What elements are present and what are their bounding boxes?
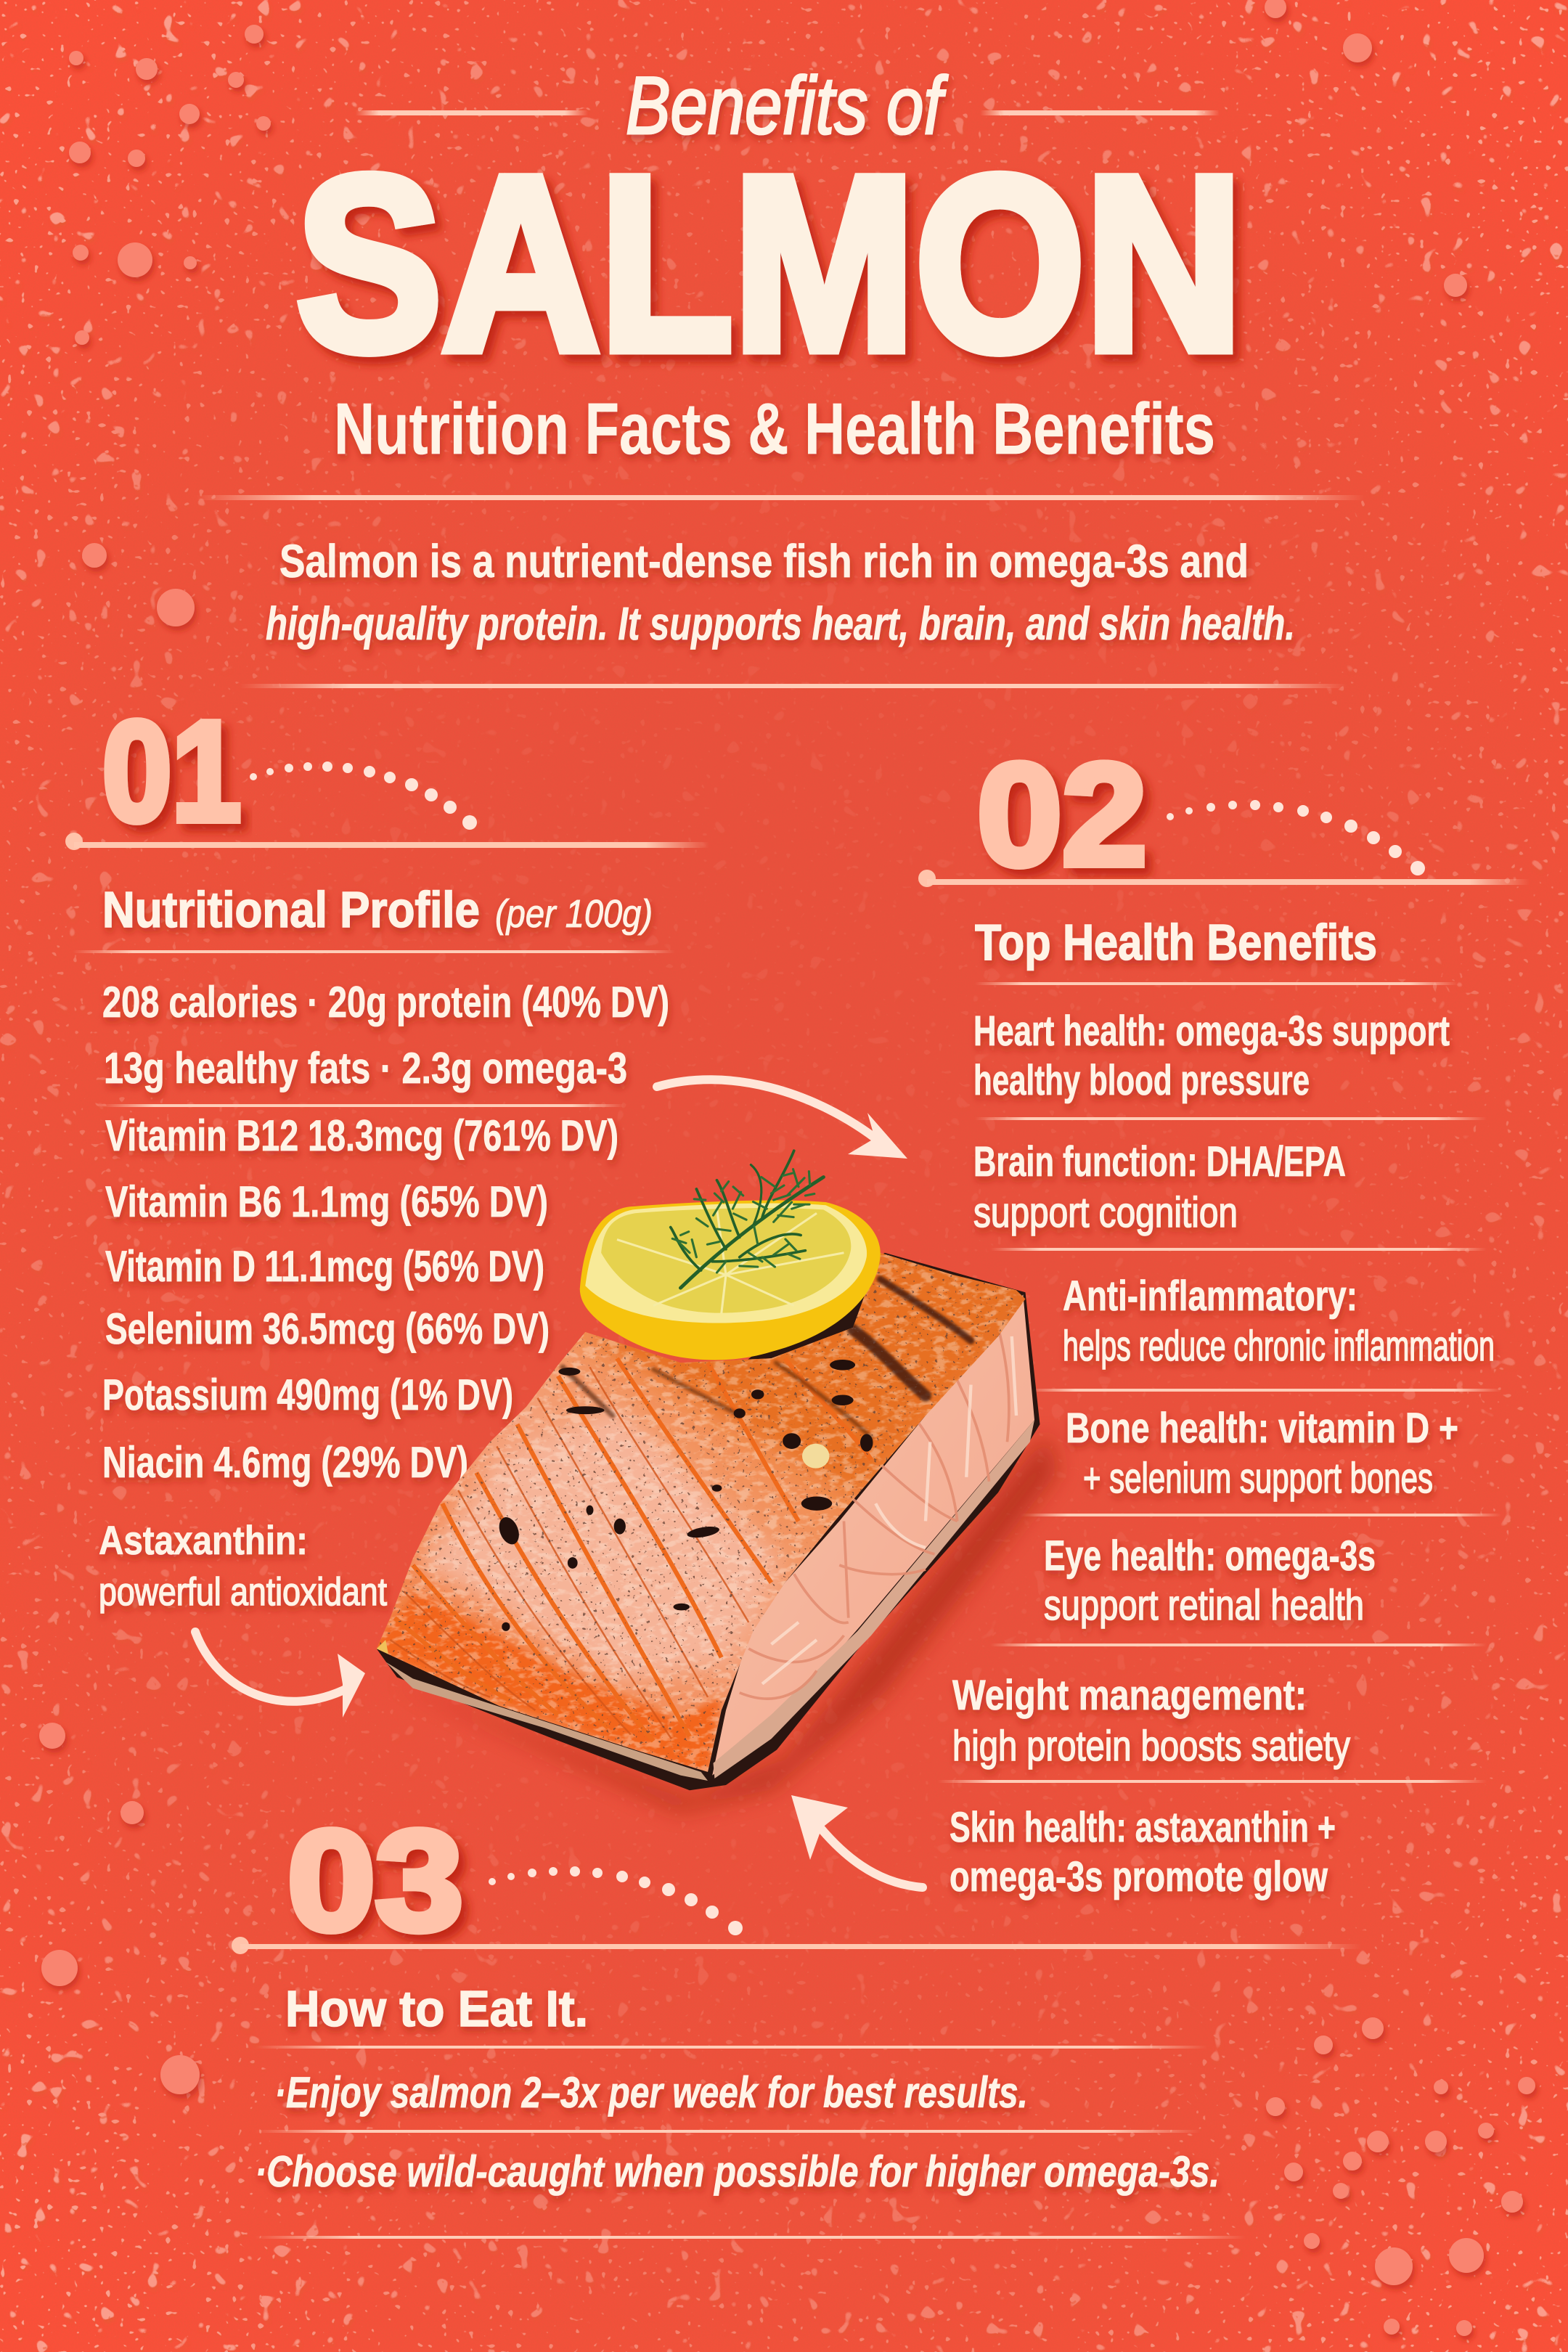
- salmon fillet illustration: [363, 1151, 1057, 1811]
- fillet top face: [377, 1253, 1025, 1772]
- header rule left: [356, 110, 588, 115]
- benefit: heart: healthy blood pressure: [973, 1057, 1310, 1104]
- arrow: antioxidant to salmon: [195, 1632, 365, 1718]
- dill sprig: [671, 1151, 823, 1288]
- benefit: bone: Bone health: vitamin D +: [1066, 1405, 1458, 1452]
- benefit: skin: omega-3s promote glow: [950, 1853, 1328, 1900]
- benefit: heart: [973, 1008, 1450, 1104]
- heading: nutritional profile: Nutritional Profile: [102, 881, 480, 938]
- header: [196, 60, 1365, 688]
- arrow: to health benefits: [657, 1079, 907, 1159]
- benefit: eye: [1044, 1532, 1376, 1629]
- subtitle: Nutrition Facts & Health Benefits: [334, 388, 1215, 470]
- benefit: anti-inflammatory: [1063, 1273, 1495, 1370]
- benefit: weight: high protein boosts satiety: [952, 1723, 1350, 1770]
- benefit: eye: support retinal health: [1044, 1582, 1364, 1629]
- section rule 02: [918, 870, 1530, 887]
- intro text: [266, 535, 1295, 650]
- benefit: bone: [1066, 1405, 1458, 1502]
- heading: how to eat it: How to Eat It.: [285, 1980, 588, 2037]
- benefit: skin: [950, 1804, 1336, 1900]
- nutrient list: Vitamin B12 18.3mcg (761% DV): [105, 1111, 618, 1160]
- nutrient list: powerful antioxidant: [99, 1570, 387, 1614]
- nutrient list: Astaxanthin:: [99, 1517, 308, 1563]
- heading: nutritional profile: (per 100g): [495, 892, 653, 936]
- header rule right: [980, 110, 1220, 115]
- number 02: 02: [977, 734, 1147, 896]
- number 03: 03: [287, 1801, 463, 1960]
- benefit: brain: Brain function: DHA/EPA: [973, 1138, 1346, 1185]
- nutrient list: [99, 978, 669, 1614]
- intro text: Salmon is a nutrient-dense fish rich in omega-3s and: [279, 535, 1249, 587]
- nutrient list: Selenium 36.5mcg (66% DV): [105, 1304, 550, 1353]
- benefit: anti-inflammatory: Anti-inflammatory:: [1063, 1273, 1357, 1320]
- fillet front crust: [385, 1662, 708, 1781]
- rule under subtitle: [196, 495, 1365, 500]
- benefit: eye: Eye health: omega-3s: [1044, 1532, 1376, 1580]
- section 02: top health benefits: [918, 734, 1530, 1900]
- fillet shadow: [391, 1433, 1057, 1811]
- benefit: bone: + selenium support bones: [1083, 1455, 1433, 1502]
- section rule 03: [232, 1937, 1362, 1954]
- arrow: skin health to salmon: [791, 1795, 923, 1887]
- section 03: how to eat it: [232, 1801, 1362, 2239]
- fillet side flesh: [712, 1294, 1034, 1779]
- benefit: weight: [952, 1672, 1350, 1770]
- benefit: weight: Weight management:: [952, 1672, 1307, 1719]
- number 01: 01: [102, 692, 241, 851]
- benefit: skin: Skin health: astaxanthin +: [950, 1804, 1336, 1851]
- kicker: Benefits of: Benefits of: [626, 60, 948, 151]
- dotted arc 03: [489, 1866, 743, 1935]
- fillet crust: [377, 1253, 1040, 1790]
- nutrient list: 208 calories · 20g protein (40% DV): [102, 978, 669, 1026]
- section rule 01: [65, 833, 709, 850]
- benefit: brain: [973, 1138, 1346, 1236]
- title: SALMON: [296, 125, 1243, 402]
- tip 2: ·Choose wild-caught when possible for higher omega-3s.: [255, 2147, 1220, 2196]
- lemon slice: [580, 1201, 881, 1360]
- dotted arc 01: [250, 761, 477, 830]
- nutrient list: Vitamin B6 1.1mg (65% DV): [105, 1177, 548, 1226]
- dotted arc 02: [1167, 800, 1425, 875]
- nutrient list: Vitamin D 11.1mcg (56% DV): [105, 1242, 544, 1291]
- heading: top health benefits: Top Health Benefits: [975, 914, 1377, 971]
- section 01: nutritional profile: [65, 692, 709, 1614]
- nutrient list: Potassium 490mg (1% DV): [102, 1371, 513, 1419]
- tip 1: ·Enjoy salmon 2–3x per week for best results.: [274, 2068, 1028, 2117]
- rule under intro: [240, 684, 1347, 688]
- intro text: high-quality protein. It supports heart, brain, and skin health.: [266, 597, 1295, 650]
- benefit: brain: support cognition: [973, 1189, 1238, 1236]
- nutrient list: 13g healthy fats · 2.3g omega-3: [104, 1044, 627, 1093]
- nutrient list: Niacin 4.6mg (29% DV): [102, 1438, 468, 1487]
